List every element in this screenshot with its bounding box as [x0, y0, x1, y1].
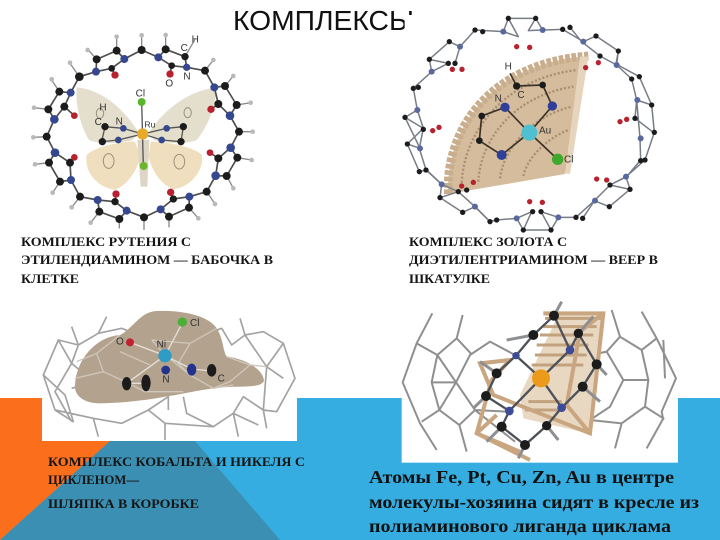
caption: cobalt and nickel [48, 454, 305, 511]
atom labels: Cl [136, 89, 145, 100]
caption: atoms in chair: Атомы Fe, Pt, Cu, Zn, Au в центре [369, 467, 674, 487]
atom labels: Cl [564, 155, 573, 166]
caption: gold: ШКАТУЛКЕ [409, 271, 490, 286]
image: nickel hat in box [42, 295, 297, 441]
caption: cobalt and nickel: ШЛЯПКА В КОРОБКЕ [48, 496, 199, 511]
atom labels: N [183, 71, 191, 82]
image: ruthenium butterfly in cage [31, 33, 255, 230]
cage back [43, 317, 295, 440]
atom labels: Ni [157, 340, 166, 351]
atom labels: Au [539, 125, 551, 136]
atom labels [116, 318, 225, 385]
atom labels: N [162, 374, 170, 385]
lattice chair [477, 313, 603, 460]
caption: cobalt and nickel: КОМПЛЕКС КОБАЛЬТА И НИКЕЛЯ С [48, 454, 305, 469]
image: gold fan in cage [402, 15, 678, 238]
cage front [75, 328, 267, 392]
nickel complex atoms [122, 317, 216, 391]
atom labels: O [116, 337, 124, 348]
atom labels: O [165, 79, 173, 90]
atom labels [495, 61, 573, 166]
background band [0, 398, 720, 540]
caption: ruthenium: КОМПЛЕКС РУТЕНИЯ С [21, 234, 191, 249]
chair complex [473, 302, 607, 458]
atom labels: C [181, 43, 188, 54]
caption: cobalt and nickel: ЦИКЛЕНОМ— [48, 472, 140, 487]
atom labels: H [99, 103, 107, 114]
caption: gold: ДИЭТИЛЕНТРИАМИНОМ — ВЕЕР В [409, 252, 658, 267]
atom labels: C [218, 374, 225, 385]
caption: ruthenium [21, 234, 273, 286]
ligand ring [31, 33, 255, 230]
ligand wire ring [402, 16, 657, 233]
atom labels: Cl [190, 318, 199, 329]
image: iron chair in cage [402, 295, 678, 463]
central gold complex [476, 73, 563, 165]
atom labels: H [192, 35, 199, 46]
atom labels [95, 35, 199, 129]
atom labels: Ru [144, 119, 156, 129]
cage wires [403, 310, 676, 452]
fan [448, 56, 588, 194]
title: КОМПЛЕКСЫ [233, 5, 414, 36]
caption: atoms in chair: полиаминового лиганда циклама [369, 516, 671, 536]
central ruthenium complex [99, 98, 187, 170]
caption: ruthenium: КЛЕТКЕ [21, 271, 79, 286]
caption: gold [409, 234, 658, 286]
caption: atoms in chair: молекулы-хозяина сидят в кресле из [369, 492, 699, 512]
atom labels: H [505, 61, 512, 72]
caption: gold: КОМПЛЕКС ЗОЛОТА С [409, 234, 567, 249]
caption: ruthenium: ЭТИЛЕНДИАМИНОМ — БАБОЧКА В [21, 252, 273, 267]
caption: atoms in chair [369, 467, 699, 536]
atom labels: C [95, 117, 102, 128]
atom labels: C [517, 90, 525, 101]
butterfly wings [76, 87, 216, 190]
atom labels: N [116, 117, 123, 128]
hat [75, 311, 264, 403]
atom labels: N [495, 93, 502, 104]
